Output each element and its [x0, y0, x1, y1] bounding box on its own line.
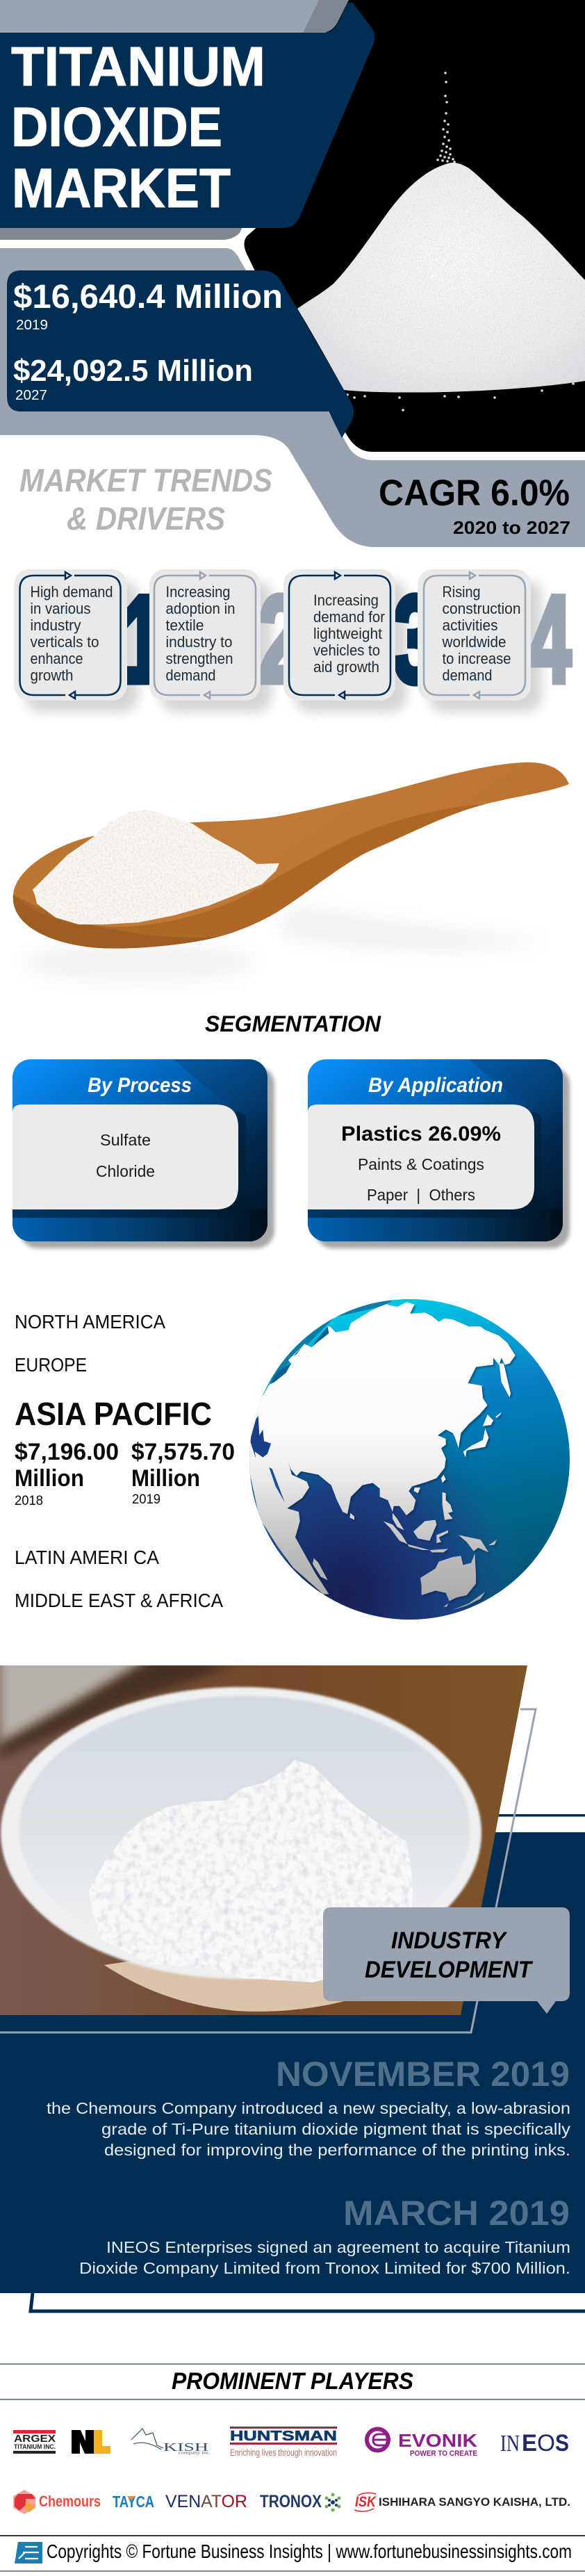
card 2 text: demand	[165, 667, 215, 684]
regions list: NORTH AMERICA	[15, 1311, 165, 1332]
card 2 text: textile	[165, 617, 204, 634]
2019 value: $16,640.4 Million	[13, 279, 283, 316]
callout: industry development	[323, 1907, 570, 2014]
asia pacific stats: ASIA PACIFIC	[15, 1396, 212, 1432]
2019 value: 2019	[16, 318, 48, 333]
2027 value: 2027	[15, 388, 47, 403]
trend card 1	[14, 569, 127, 701]
logo: chemours: Chemours	[39, 2493, 101, 2510]
card 2 text	[165, 583, 235, 684]
development: november 2019: grade of Ti-Pure titanium dioxide pigment that is specifically	[101, 2120, 571, 2138]
card 3 text: vehicles to	[313, 642, 380, 659]
logo: argex: TITANIUM INC.	[14, 2443, 56, 2450]
asia pacific stats: $7,196.00	[15, 1439, 119, 1465]
card 4 text	[442, 583, 521, 684]
heading: market trends and drivers	[19, 462, 272, 537]
card 4 text: worldwide	[442, 633, 506, 651]
globe	[247, 1296, 573, 1623]
card 1 text: verticals to	[31, 633, 99, 651]
logo: evonik: POWER TO CREATE	[410, 2449, 477, 2458]
card 1 text: enhance	[31, 650, 83, 667]
card 2 text: Increasing	[165, 583, 231, 601]
navy bracket below panel	[31, 2293, 585, 2311]
photo: powder in white bowl	[0, 1654, 528, 2016]
card 1 text: High demand	[31, 583, 113, 601]
photo frame outline	[0, 1709, 536, 2032]
asia pacific stats: $7,575.70	[131, 1439, 235, 1465]
CAGR callout: CAGR 6.0%	[379, 473, 570, 514]
logo: ISK ishihara sangyo kaisha: ISK	[355, 2494, 377, 2510]
regions list: MIDDLE EAST & AFRICA	[15, 1590, 223, 1611]
development: march 2019: INEOS Enterprises signed an agreement to acquire Titanium	[106, 2238, 570, 2256]
development: march 2019: Dioxide Company Limited from Tronox Limited for $700 Million.	[79, 2259, 570, 2277]
card 4 text: Rising	[442, 583, 481, 601]
title text: TITANIUM	[11, 35, 265, 97]
development: november 2019: NOVEMBER 2019	[276, 2055, 570, 2094]
card 1 text: growth	[31, 667, 74, 684]
2027 value: $24,092.5 Million	[13, 354, 253, 388]
card 4 text: to increase	[442, 650, 511, 667]
title banner	[0, 2, 374, 228]
regions list: LATIN AMERI CA	[15, 1547, 159, 1568]
logo: argex	[13, 2430, 56, 2454]
icon: fortune business insights logo	[15, 2542, 42, 2563]
development: november 2019	[47, 2055, 571, 2159]
logo: ineos: IN	[500, 2431, 520, 2456]
top gray banner	[0, 0, 349, 33]
heading: segmentation: SEGMENTATION	[205, 1011, 381, 1036]
card 1 text: in various	[31, 600, 90, 617]
card shadows	[25, 580, 542, 712]
callout: industry development: DEVELOPMENT	[365, 1957, 534, 1983]
callout: industry development: INDUSTRY	[391, 1927, 508, 1954]
heading: prominent players: PROMINENT PLAYERS	[172, 2368, 413, 2395]
market size panel	[7, 270, 354, 438]
wooden spoon with powder	[13, 763, 569, 981]
title text: MARKET	[12, 157, 231, 219]
logo: ineos: E	[522, 2430, 537, 2456]
card 3 text: Increasing	[313, 592, 379, 609]
by application list: Plastics 26.09%	[341, 1123, 501, 1146]
asia pacific stats: 2018	[15, 1494, 43, 1508]
card 3 text: aid growth	[313, 658, 379, 676]
dark gray band below title	[0, 222, 245, 240]
card 4 text: construction	[442, 600, 521, 617]
development: november 2019: designed for improving the performance of the printing inks.	[104, 2141, 570, 2159]
card 3 text: demand for	[313, 608, 385, 626]
trend numbers: 3	[393, 570, 438, 708]
heading: market trends and drivers: MARKET TRENDS	[19, 462, 272, 498]
logo: tayca: TAYCA	[113, 2493, 154, 2511]
logo: huntsman	[230, 2427, 337, 2458]
card 4 text: activities	[442, 617, 497, 634]
logo: huntsman: HUNTSMAN	[230, 2429, 337, 2444]
trend numbers: 2	[258, 570, 303, 708]
card 2 text: adoption in	[165, 600, 235, 617]
logo: evonik	[367, 2429, 477, 2458]
by process list	[13, 1104, 238, 1209]
development: march 2019: MARCH 2019	[343, 2194, 570, 2233]
CAGR callout	[379, 473, 570, 538]
development: november 2019: the Chemours Company introduced a new specialty, a low-abrasion	[47, 2099, 570, 2117]
navy development panel	[0, 1832, 585, 2293]
logo: huntsman: Enriching lives through innovation	[230, 2447, 337, 2458]
card 2 text: industry to	[165, 633, 232, 651]
CAGR callout: 2020 to 2027	[453, 517, 570, 538]
regions list	[15, 1311, 235, 1611]
trend numbers	[123, 570, 571, 708]
logo: ISK ishihara sangyo kaisha: ISHIHARA SANGYO KAISHA, LTD.	[379, 2495, 570, 2509]
logo: evonik: EVONIK	[398, 2430, 477, 2451]
panel: by process	[7, 1059, 274, 1248]
logo: ineos	[500, 2430, 569, 2456]
2019 value	[13, 279, 283, 333]
development: march 2019	[79, 2194, 570, 2277]
panel: by application	[302, 1059, 570, 1248]
asia pacific stats	[15, 1396, 235, 1508]
title text	[11, 35, 265, 219]
title text: DIOXIDE	[11, 96, 222, 158]
logo: ISK ishihara sangyo kaisha	[354, 2493, 570, 2511]
regions list: EUROPE	[15, 1354, 87, 1376]
asia pacific stats: Million	[15, 1465, 84, 1492]
gray band behind market size and CAGR	[0, 248, 585, 547]
logo: kish: KISH	[163, 2440, 208, 2454]
trend card 2	[149, 569, 261, 701]
navy accent line	[498, 1814, 585, 1817]
logo: ineos: S	[555, 2430, 569, 2456]
trend numbers: 1	[123, 570, 160, 708]
by process list: Chloride	[96, 1162, 155, 1180]
card 4 text: demand	[442, 667, 492, 684]
footer copyright	[0, 2535, 585, 2572]
by application label: By Application	[368, 1074, 503, 1097]
by application list: Paper | Others	[367, 1186, 475, 1204]
header photo: salt pile on black	[245, 0, 585, 452]
by process label: By Process	[88, 1074, 192, 1097]
logo: ineos: O	[537, 2430, 555, 2456]
asia pacific stats: Million	[131, 1465, 200, 1492]
card 1 text: industry	[31, 617, 81, 634]
by application list: Paints & Coatings	[358, 1155, 484, 1173]
by application list	[308, 1104, 534, 1209]
2027 value	[13, 354, 253, 403]
logo: tronox: TRONOX	[260, 2492, 322, 2511]
card 3 text	[313, 592, 385, 676]
logo: argex: ARGEX	[14, 2433, 56, 2445]
logo: chemours	[13, 2490, 101, 2514]
logo: venator: VENATOR	[165, 2492, 247, 2511]
by process list: Sulfate	[100, 1131, 151, 1149]
trend card 3	[283, 569, 395, 701]
asia pacific stats: 2019	[132, 1492, 160, 1507]
trend card 4	[418, 569, 531, 701]
logo: kish: company inc.	[179, 2451, 211, 2455]
card 1 text	[31, 583, 113, 684]
logo: NL	[72, 2430, 110, 2454]
card 2 text: strengthen	[165, 650, 233, 667]
heading: market trends and drivers: & DRIVERS	[67, 500, 225, 537]
logo: kish	[131, 2429, 211, 2455]
card 3 text: lightweight	[313, 625, 382, 642]
